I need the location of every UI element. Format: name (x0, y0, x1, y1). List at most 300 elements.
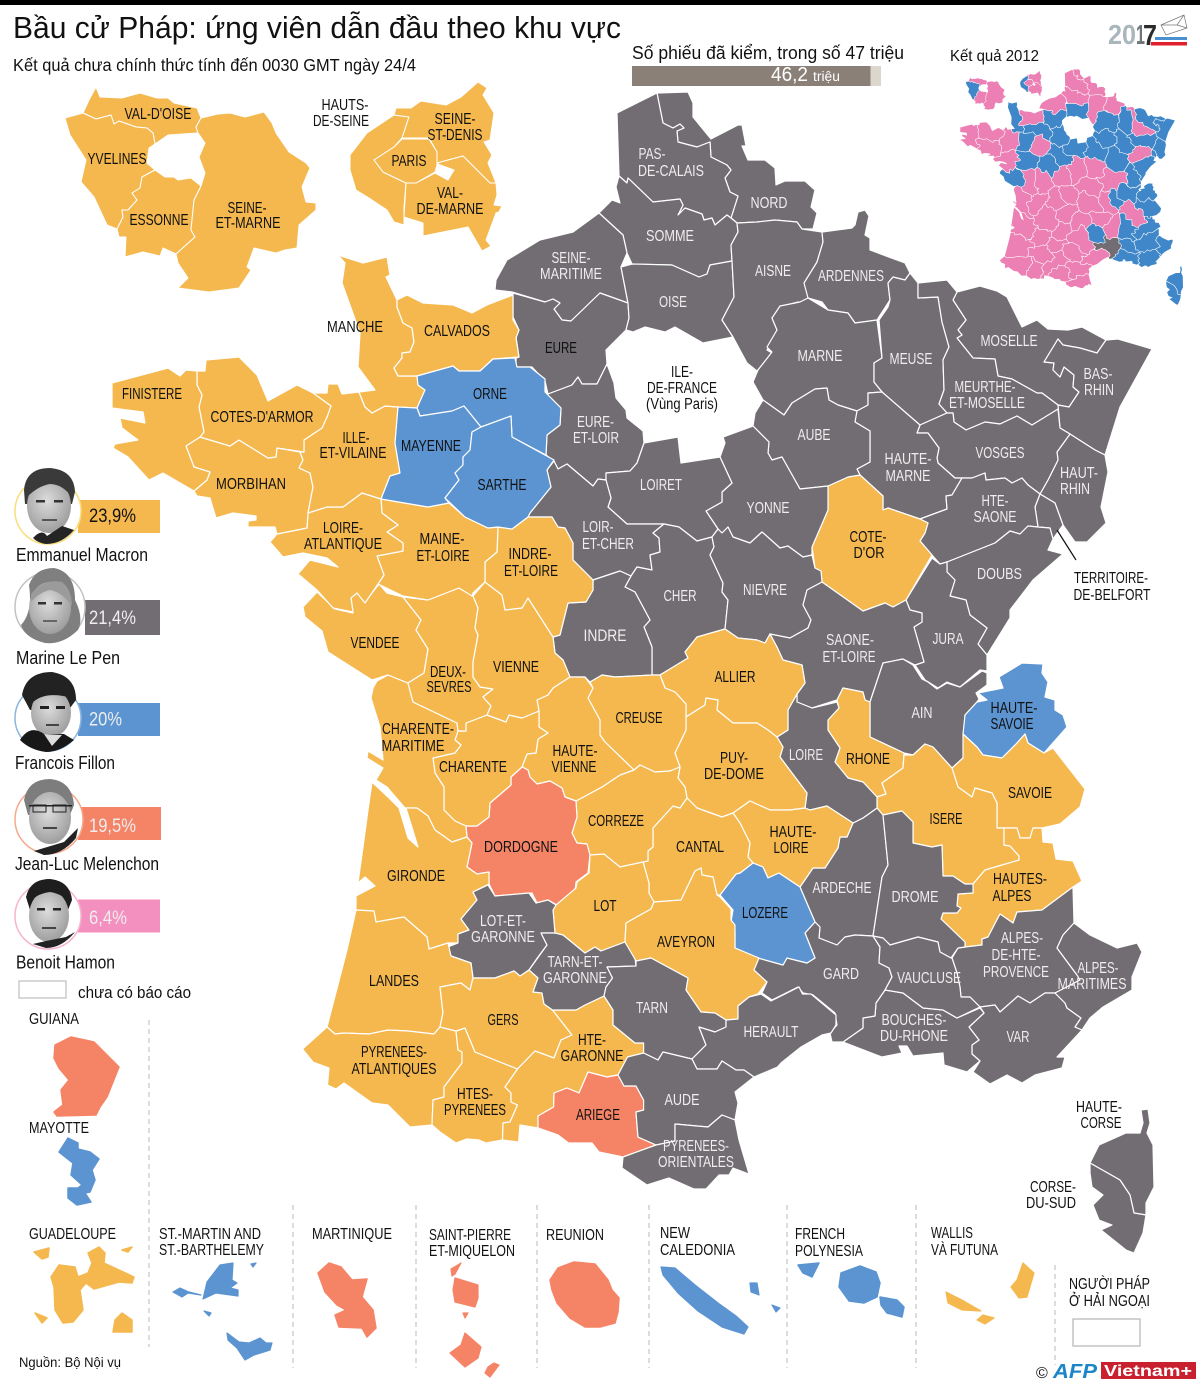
2017 election logo: 7 (1143, 20, 1157, 52)
Haute-Loire (733, 801, 853, 887)
Hauts-de-Seine label (313, 97, 369, 130)
Hautes-Alpes: ALPES (992, 888, 1032, 905)
Drome (873, 811, 973, 958)
Ile-de-France inset: Paris region (65, 82, 502, 292)
Eure-et-Loir: ET-LOIR (573, 430, 619, 447)
Seine-Saint-Denis (394, 82, 496, 183)
Cotes-d'Armor (197, 357, 331, 458)
Ain (870, 659, 987, 768)
Cher (625, 524, 728, 675)
Yvelines (65, 113, 155, 229)
French abroad box: NGƯỜI PHÁP (1069, 1276, 1150, 1293)
Ile-de-France label in the gap of the main map: ILE- (671, 364, 693, 381)
Loir-et-Cher (528, 461, 664, 580)
Morbihan (186, 437, 313, 534)
Pas-de-Calais (617, 93, 738, 225)
Somme (599, 176, 738, 277)
Corsica labels: CORSE- (1030, 1179, 1076, 1196)
Haute-Loire: HAUTE- (770, 824, 816, 841)
Loir-et-Cher: LOIR- (582, 519, 614, 536)
overseas territory: Martinique: MARTINIQUE (312, 1226, 392, 1243)
subtitle: Kết quả chưa chính thức tính đến 0030 GMT ngày 24/4 (13, 55, 416, 75)
Hautes-Alpes: HAUTES- (993, 871, 1047, 888)
overseas territory: Saint-Pierre-et-Miquelon (429, 1227, 515, 1377)
Ariege: ARIEGE (576, 1107, 620, 1124)
Hauts-de-Seine label: DE-SEINE (313, 113, 369, 130)
Hautes-Alpes (941, 828, 1082, 947)
Haute-Savoie: HAUTE- (990, 700, 1038, 717)
Aude (618, 1052, 754, 1145)
AFP and Vietnam+ credit logos: © (1036, 1365, 1048, 1382)
Dordogne (466, 767, 590, 905)
Meuse: MEUSE (890, 351, 932, 368)
Morbihan: MORBIHAN (216, 476, 286, 493)
Ardeche (800, 808, 888, 945)
Haute-Marne: MARNE (886, 468, 930, 485)
Deux-Sevres: DEUX- (430, 664, 466, 681)
Aveyron (625, 868, 767, 1020)
Vosges (917, 409, 1070, 494)
Orne (417, 358, 561, 455)
Indre-et-Loire: ET-LOIRE (504, 563, 558, 580)
Val-de-Marne (404, 156, 502, 251)
Lot-et-Garonne: LOT-ET- (480, 913, 526, 930)
overseas territory: French Polynesia: POLYNESIA (795, 1243, 864, 1260)
overseas territory: Guiana (29, 1011, 119, 1116)
Yonne: YONNE (746, 500, 790, 517)
Mayenne: MAYENNE (401, 438, 461, 455)
Cote-d'Or (812, 475, 932, 611)
Pyrenees-Atlantiques: ATLANTIQUES (352, 1061, 436, 1078)
Seine-et-Marne: SEINE- (228, 200, 266, 217)
overseas territory: Mayotte (29, 1120, 99, 1205)
Deux-Sevres (403, 588, 493, 731)
2017 election logo: 20 (1108, 19, 1136, 50)
Seine-Maritime (495, 213, 628, 321)
Loire-Atlantique: LOIRE- (323, 520, 363, 537)
Cote-d'Or: COTE- (850, 529, 886, 546)
French abroad box (1069, 1276, 1150, 1346)
Aude: AUDE (664, 1092, 700, 1109)
Tarn: TARN (636, 1000, 668, 1017)
Creuse: CREUSE (616, 710, 662, 727)
Rhone (828, 688, 904, 797)
Eure (513, 293, 629, 394)
Loire (777, 694, 877, 823)
Bas-Rhin: RHIN (1084, 382, 1114, 399)
Ariege (538, 1072, 656, 1157)
Val-d'Oise (83, 87, 201, 144)
Val-de-Marne: VAL- (437, 185, 463, 202)
Corse-du-Sud (1090, 1163, 1146, 1253)
Nievre: NIEVRE (743, 582, 787, 599)
Haute-Vienne: HAUTE- (552, 743, 598, 760)
Ille-et-Vilaine (299, 384, 400, 513)
Charente (433, 711, 548, 826)
Maine-et-Loire (377, 499, 498, 600)
Oise: OISE (659, 294, 687, 311)
Manche (327, 255, 425, 413)
Pyrenees-Atlantiques: PYRENEES- (361, 1044, 427, 1061)
candidate: Marine Le Pen: Marine Le Pen (16, 648, 120, 668)
Territoire-de-Belfort callout: DE-BELFORT (1074, 587, 1151, 604)
Hautes-Pyrenees (432, 1028, 518, 1143)
Marne (753, 298, 882, 415)
Seine-Saint-Denis: SEINE- (434, 111, 476, 128)
overseas territory: French Polynesia: FRENCH (795, 1226, 845, 1243)
Haute-Garonne (502, 996, 644, 1142)
Lozere (720, 863, 815, 965)
Doubs: DOUBS (977, 566, 1022, 583)
Alpes-Maritimes (1055, 923, 1142, 1030)
Allier: ALLIER (714, 669, 756, 686)
2012 results mini map (950, 48, 1183, 305)
Essonne (117, 170, 201, 257)
Haute-Saone: SAONE (974, 509, 1016, 526)
Correze: CORREZE (588, 813, 644, 830)
AFP and Vietnam+ credit logos: Vietnam+ (1104, 1363, 1192, 1380)
Haute-Vienne: VIENNE (552, 759, 596, 776)
Haute-Vienne (522, 677, 634, 801)
overseas territory: Guadeloupe: GUADELOUPE (29, 1226, 116, 1243)
Isere: ISERE (930, 811, 962, 828)
Ile-de-France label in the gap of the main map (646, 364, 718, 413)
Cher: CHER (664, 588, 696, 605)
candidate: Benoit Hamon: Benoit Hamon (16, 952, 115, 972)
Haute-Saone (920, 473, 1040, 564)
Val-d'Oise: VAL-D'OISE (124, 106, 192, 123)
Gers: GERS (488, 1012, 518, 1029)
Haute-Marne: HAUTE- (884, 451, 932, 468)
Lot (553, 854, 654, 953)
candidate: Marine Le Pen (15, 568, 160, 668)
Corsica labels: DU-SUD (1026, 1195, 1076, 1212)
Lot: LOT (594, 898, 617, 915)
Seine-et-Marne (176, 112, 316, 292)
AFP and Vietnam+ credit logos (1036, 1361, 1196, 1383)
Nord (657, 92, 817, 229)
Loire: LOIRE (789, 747, 823, 764)
Savoie: SAVOIE (1008, 785, 1052, 802)
Maine-et-Loire: ET-LOIRE (416, 548, 470, 565)
Aube: AUBE (798, 427, 830, 444)
Ille-et-Vilaine: ET-VILAINE (320, 445, 386, 462)
Territoire-de-Belfort callout: TERRITOIRE- (1074, 570, 1148, 587)
overseas territory: St-Martin and St-Barthelemy: ST.-BARTHELEMY (159, 1242, 264, 1259)
overseas territory: Reunion: REUNION (546, 1227, 604, 1244)
Vosges: VOSGES (976, 445, 1024, 462)
Pyrenees-Orientales (622, 1115, 749, 1189)
Var (969, 993, 1082, 1084)
candidate: Benoit Hamon (15, 879, 160, 972)
Nord: NORD (750, 195, 788, 212)
Indre: INDRE (584, 626, 626, 645)
votes counted progress bar: Số phiếu đã kiểm, trong số 47 triệu (632, 43, 904, 63)
Eure-et-Loir: EURE- (577, 414, 614, 431)
Lot-et-Garonne: GARONNE (471, 929, 535, 946)
Meuse (874, 273, 949, 425)
overseas territory: St-Martin and St-Barthelemy: ST.-MARTIN AND (159, 1226, 261, 1243)
Yvelines: YVELINES (88, 151, 146, 168)
Saone-et-Loire: SAONE- (826, 632, 874, 649)
Vendee: VENDEE (350, 635, 400, 652)
candidate: Jean-Luc Melenchon (15, 779, 161, 874)
Vienne: VIENNE (493, 659, 539, 676)
top black bar (0, 0, 1200, 5)
Seine-et-Marne: ET-MARNE (216, 215, 280, 232)
Ardennes (804, 210, 910, 323)
Pas-de-Calais: DE-CALAIS (638, 163, 704, 180)
candidate: Emmanuel Macron: 23,9% (89, 506, 136, 527)
overseas territory: St-Martin and St-Barthelemy (159, 1226, 272, 1360)
Loiret: LOIRET (640, 477, 682, 494)
Aisne: AISNE (755, 263, 791, 280)
Hauts-de-Seine label: HAUTS- (322, 97, 368, 114)
Bas-Rhin (1044, 339, 1152, 455)
Deux-Sevres: SEVRES (426, 679, 472, 696)
Lot-et-Garonne (448, 885, 556, 978)
Bas-Rhin: BAS- (1084, 366, 1112, 383)
Haute-Savoie (963, 663, 1067, 758)
Rhone: RHONE (846, 751, 890, 768)
Haute-Corse (1090, 1109, 1154, 1215)
Corsica labels: CORSE (1080, 1115, 1122, 1132)
Loiret (606, 437, 732, 541)
Manche: MANCHE (327, 319, 383, 336)
Tarn-et-Garonne: TARN-ET- (548, 954, 602, 971)
overseas territory: Wallis and Futuna (931, 1225, 1034, 1324)
Ille-et-Vilaine: ILLE- (342, 430, 370, 447)
Pas-de-Calais: PAS- (638, 146, 666, 163)
overseas territory: Saint-Pierre-et-Miquelon: SAINT-PIERRE (429, 1227, 511, 1244)
Ile-de-France label in the gap of the main map: DE-FRANCE (647, 380, 717, 397)
Charente-Maritime: MARITIME (382, 738, 444, 755)
overseas territory: Guadeloupe (29, 1226, 134, 1332)
candidate: Emmanuel Macron: Emmanuel Macron (16, 545, 148, 565)
Seine-Saint-Denis: ST-DENIS (428, 127, 482, 144)
Meurthe-et-Moselle (918, 280, 1059, 430)
Marne: MARNE (798, 348, 842, 365)
candidate: Benoit Hamon: 6,4% (89, 908, 127, 929)
Maine-et-Loire: MAINE- (420, 531, 464, 548)
overseas territory: Wallis and Futuna: WALLIS (931, 1225, 973, 1242)
Eure-et-Loir (545, 364, 644, 486)
Haut-Rhin: HAUT- (1060, 465, 1098, 482)
overseas territory: Reunion (546, 1227, 619, 1327)
main map of France by department (112, 92, 1154, 1253)
source note: Nguồn: Bộ Nội vụ (19, 1354, 121, 1370)
Paris (374, 139, 437, 183)
Meurthe-et-Moselle: MEURTHE- (954, 379, 1016, 396)
Cantal: CANTAL (676, 839, 724, 856)
overseas territory: Mayotte: MAYOTTE (29, 1120, 89, 1137)
Doubs (947, 526, 1063, 655)
Cantal (643, 798, 753, 902)
Haute-Savoie: SAVOIE (990, 716, 1034, 733)
Indre (553, 571, 652, 682)
Dordogne: DORDOGNE (484, 839, 558, 856)
candidate: Jean-Luc Melenchon: Jean-Luc Melenchon (15, 854, 159, 874)
Mayenne (381, 406, 481, 507)
Alpes-de-Haute-Provence: ALPES- (1001, 930, 1043, 947)
Yonne (706, 426, 828, 557)
Hauts-de-Seine (350, 115, 409, 225)
Finistere: FINISTERE (122, 386, 182, 403)
overseas territory: Wallis and Futuna: VÀ FUTUNA (931, 1242, 999, 1259)
Puy-de-Dome: PUY- (720, 750, 748, 767)
overseas territory: Martinique (312, 1226, 392, 1337)
Charente-Maritime (367, 675, 467, 842)
Essonne: ESSONNE (130, 212, 188, 229)
Tarn-et-Garonne: GARONNE (543, 970, 607, 987)
2012 results mini map: Kết quả 2012 (950, 48, 1039, 65)
Gers (440, 970, 572, 1069)
dashed separators between overseas territories (149, 1020, 1055, 1368)
candidate: Francois Fillon: 20% (89, 710, 122, 730)
Drome: DROME (892, 889, 938, 906)
Vienne (473, 582, 570, 722)
Aveyron: AVEYRON (657, 934, 715, 951)
Loire-Atlantique: ATLANTIQUE (304, 536, 382, 553)
Ain: AIN (912, 705, 932, 722)
2017 election logo (1108, 15, 1187, 52)
Herault (692, 987, 836, 1077)
Oise (621, 261, 734, 343)
Puy-de-Dome: DE-DOME (704, 766, 764, 783)
Orne: ORNE (473, 386, 507, 403)
Allier (660, 629, 805, 737)
Ardennes: ARDENNES (818, 268, 884, 285)
Somme: SOMME (646, 228, 694, 245)
Creuse (588, 675, 686, 772)
Territoire-de-Belfort callout (1057, 530, 1151, 604)
Eure: EURE (545, 340, 577, 357)
votes counted progress bar: 46,2 (771, 64, 808, 86)
Loire-Atlantique (270, 493, 403, 612)
Puy-de-Dome (675, 698, 807, 817)
Alpes-de-Haute-Provence: DE-HTE- (992, 947, 1040, 964)
Landes (327, 910, 473, 1034)
Tarn-et-Garonne (529, 933, 636, 1010)
Paris: PARIS (392, 153, 426, 170)
Gard (753, 922, 892, 1042)
Charente: CHARENTE (439, 759, 507, 776)
Var: VAR (1006, 1029, 1030, 1046)
Bouches-du-Rhone: BOUCHES- (882, 1012, 946, 1029)
Haute-Saone: HTE- (982, 493, 1008, 510)
overseas territory: Guiana: GUIANA (29, 1011, 80, 1028)
Hautes-Pyrenees: HTES- (457, 1086, 493, 1103)
Indre-et-Loire: INDRE- (508, 546, 552, 563)
overseas territory: French Polynesia (795, 1226, 904, 1317)
Vaucluse: VAUCLUSE (897, 970, 961, 987)
Calvados: CALVADOS (424, 323, 490, 340)
Seine-Maritime: SEINE- (552, 250, 590, 267)
Ile-de-France label in the gap of the main map: (Vùng Paris) (646, 396, 718, 413)
Vendee (303, 584, 428, 683)
Haute-Marne (855, 392, 962, 519)
votes counted progress bar: triệu (813, 69, 840, 84)
Isere (877, 744, 1019, 884)
Aube (753, 388, 870, 489)
Correze (572, 765, 687, 867)
Bouches-du-Rhone: DU-RHONE (880, 1028, 948, 1045)
AFP and Vietnam+ credit logos: AFP (1052, 1361, 1098, 1383)
French abroad box: Ở HẢI NGOẠI (1069, 1292, 1150, 1310)
Gironde: GIRONDE (387, 868, 445, 885)
Cote-d'Or: D'OR (854, 545, 884, 562)
Hautes-Pyrenees: PYRENEES (444, 1102, 506, 1119)
Calvados (394, 295, 519, 376)
Saone-et-Loire (770, 582, 924, 708)
Sarthe (445, 416, 554, 529)
Saone-et-Loire: ET-LOIRE (822, 649, 876, 666)
Bouches-du-Rhone (843, 990, 984, 1072)
Vaucluse (873, 936, 980, 1018)
Ardeche: ARDECHE (812, 880, 872, 897)
Gironde (356, 782, 489, 949)
Seine-Maritime: MARITIME (540, 266, 602, 283)
Territoire-de-Belfort (1035, 494, 1063, 539)
Haute-Garonne: HTE- (578, 1032, 606, 1049)
Savoie (952, 734, 1085, 838)
Lozere: LOZERE (742, 905, 788, 922)
Jura: JURA (932, 631, 964, 648)
candidate: Jean-Luc Melenchon: 19,5% (89, 816, 136, 837)
Haute-Loire: LOIRE (774, 840, 808, 857)
candidate: Emmanuel Macron (15, 468, 160, 565)
Haute-Garonne: GARONNE (560, 1048, 624, 1065)
Pyrenees-Orientales: PYRENEES- (663, 1138, 729, 1155)
Cotes-d'Armor: COTES-D'ARMOR (210, 409, 314, 426)
candidate: Francois Fillon (15, 672, 160, 773)
title: Bầu cử Pháp: ứng viên dẫn đầu theo khu vực (13, 10, 621, 45)
Pyrenees-Orientales: ORIENTALES (658, 1154, 734, 1171)
Tarn (604, 958, 726, 1060)
Alpes-de-Haute-Provence (952, 887, 1080, 1012)
Moselle: MOSELLE (980, 333, 1038, 350)
legend: not yet reported: chưa có báo cáo (78, 983, 191, 1002)
Loir-et-Cher: ET-CHER (582, 536, 634, 553)
Herault: HERAULT (744, 1024, 799, 1041)
Gard: GARD (823, 966, 859, 983)
overseas territory: New Caledonia: CALEDONIA (660, 1242, 736, 1259)
Nievre (710, 527, 822, 643)
overseas territory: New Caledonia (660, 1225, 780, 1334)
overseas territory: Saint-Pierre-et-Miquelon: ET-MIQUELON (429, 1243, 515, 1260)
Indre-et-Loire (485, 517, 593, 637)
Val-de-Marne: DE-MARNE (416, 201, 484, 218)
2017 election logo: 1 (1136, 19, 1145, 50)
legend: not yet reported (19, 981, 191, 1002)
Landes: LANDES (369, 973, 419, 990)
Jura (906, 558, 987, 688)
Haut-Rhin: RHIN (1060, 481, 1090, 498)
Pyrenees-Atlantiques (302, 1027, 462, 1127)
Aisne (722, 220, 823, 371)
Finistere (112, 368, 210, 491)
overseas territory: New Caledonia: NEW (660, 1225, 690, 1242)
Corsica labels (1026, 1099, 1122, 1212)
Alpes-Maritimes: ALPES- (1078, 960, 1118, 977)
Corsica labels: HAUTE- (1076, 1099, 1122, 1116)
Charente-Maritime: CHARENTE- (382, 721, 454, 738)
votes counted progress bar (632, 43, 904, 86)
Sarthe: SARTHE (478, 477, 526, 494)
Moselle (953, 286, 1106, 407)
Haut-Rhin (1040, 434, 1108, 542)
candidate: Francois Fillon: Francois Fillon (15, 753, 115, 773)
